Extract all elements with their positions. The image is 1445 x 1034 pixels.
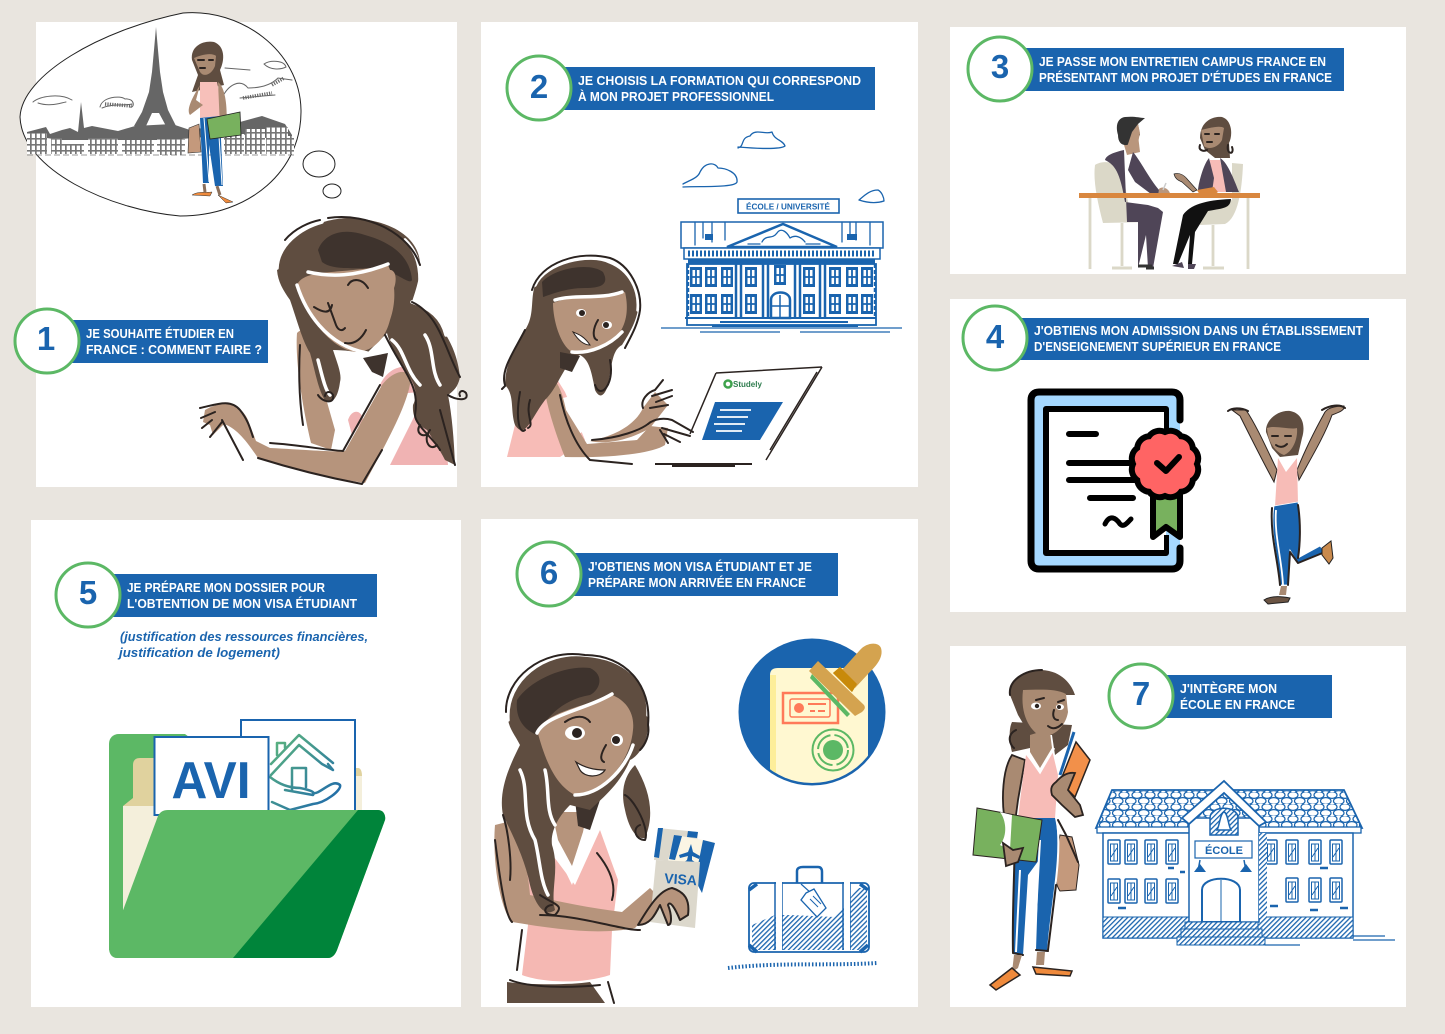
bag — [1055, 835, 1079, 891]
housing document — [241, 720, 355, 815]
panel 4: admission — [950, 299, 1406, 612]
step 2 header: JE CHOISIS LA FORMATION QUI CORRESPOND — [578, 73, 861, 88]
woman holding visa — [494, 654, 715, 1003]
laptop — [655, 367, 822, 466]
panel 5: visa file — [31, 520, 461, 1007]
small woman standing — [188, 42, 241, 203]
panel 7: joining school — [950, 646, 1406, 1007]
suitcase — [728, 867, 877, 968]
step 6 header: PRÉPARE MON ARRIVÉE EN FRANCE — [588, 575, 806, 590]
step 1 header: 1 — [37, 320, 55, 357]
student with folder and book — [973, 670, 1090, 990]
man — [1105, 117, 1170, 268]
step 4 header: D'ENSEIGNEMENT SUPÉRIEUR EN FRANCE — [1034, 339, 1281, 354]
AVI document: AVI — [172, 752, 250, 810]
woman at laptop — [502, 256, 693, 464]
note in italics: (justification des ressources financières, — [120, 629, 368, 644]
step 3 header — [968, 37, 1344, 101]
sign: ÉCOLE / UNIVERSITÉ — [746, 202, 830, 212]
panel 1: wish to study in France — [15, 13, 467, 487]
AVI document — [154, 737, 268, 815]
panel 3: Campus France interview — [950, 27, 1406, 274]
step 6 header — [517, 542, 838, 606]
step 4 header: 4 — [986, 318, 1005, 355]
passport stamp icon — [738, 638, 886, 790]
school building — [1096, 781, 1395, 945]
step 7 header: ÉCOLE EN FRANCE — [1180, 697, 1295, 712]
clouds — [33, 61, 292, 108]
interview scene — [1079, 117, 1260, 269]
boarding pass and visa — [638, 828, 715, 928]
university building illustration — [661, 132, 902, 332]
boarding pass and visa: VISA — [664, 870, 698, 888]
Eiffel tower — [134, 27, 176, 126]
step 5 header: JE PRÉPARE MON DOSSIER POUR — [127, 580, 326, 595]
woman — [1172, 117, 1239, 269]
step 3 header: PRÉSENTANT MON PROJET D'ÉTUDES EN FRANCE — [1039, 70, 1332, 85]
clouds — [683, 132, 884, 203]
step 4 header: J'OBTIENS MON ADMISSION DANS UN ÉTABLISSEMENT — [1034, 323, 1363, 338]
green folder — [973, 808, 1042, 862]
step 2 header: À MON PROJET PROFESSIONNEL — [578, 89, 774, 104]
certificate with seal icon — [1030, 392, 1198, 570]
note in italics — [117, 629, 368, 660]
step 6 header: J'OBTIENS MON VISA ÉTUDIANT ET JE — [588, 559, 812, 574]
Paris skyline — [27, 102, 296, 155]
step 3 header: JE PASSE MON ENTRETIEN CAMPUS FRANCE EN — [1039, 54, 1326, 69]
woman celebrating — [1228, 406, 1345, 604]
school sign — [1195, 841, 1252, 858]
thought bubble with Paris scene — [20, 13, 341, 216]
step 5 header: 5 — [79, 574, 97, 611]
step 4 header — [963, 306, 1369, 370]
orange book — [1060, 742, 1090, 797]
school sign: ÉCOLE — [1205, 844, 1243, 857]
step 3 header: 3 — [991, 48, 1009, 85]
step 1 header: FRANCE : COMMENT FAIRE ? — [86, 342, 262, 357]
panel 6: visa obtained — [481, 519, 918, 1007]
note in italics: justification de logement) — [117, 645, 280, 660]
step 5 header — [56, 563, 377, 627]
panel 2: choose a programme — [481, 22, 918, 487]
step 7 header: 7 — [1132, 675, 1150, 712]
folder with documents — [109, 720, 385, 958]
head — [1010, 670, 1075, 735]
step 6 header: 6 — [540, 554, 558, 591]
step 7 header — [1109, 664, 1332, 728]
step 5 header: L'OBTENTION DE MON VISA ÉTUDIANT — [127, 596, 357, 611]
step 1 header: JE SOUHAITE ÉTUDIER EN — [86, 326, 234, 341]
big woman looking down — [200, 217, 467, 484]
step 2 header — [507, 56, 875, 120]
table legs and chairs — [1090, 198, 1248, 269]
sign — [738, 199, 839, 213]
step 1 header — [15, 309, 268, 373]
step 2 header: 2 — [530, 68, 548, 105]
laptop: Studely — [733, 380, 762, 389]
step 7 header: J'INTÈGRE MON — [1180, 681, 1277, 696]
